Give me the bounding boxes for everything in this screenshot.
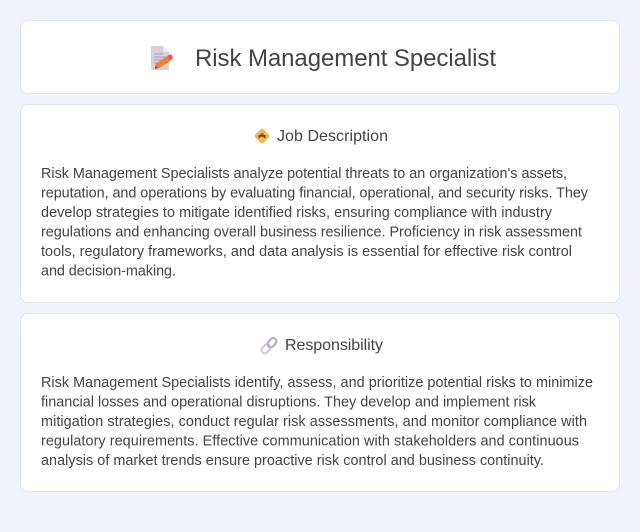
icon: chain link	[260, 336, 278, 354]
text block: responsibility: analysis of market trends ensure proactive risk control and business continuity.	[41, 453, 544, 469]
title text: Risk Management Specialist	[195, 45, 496, 72]
text block: job description	[41, 166, 589, 280]
heading: job description: Job Description	[277, 128, 388, 145]
text block: job description: tools, regulatory frameworks, and data analysis is essential for effective risk control	[41, 244, 572, 260]
text block: responsibility: Risk Management Specialists identify, assess, and prioritize potential risks to minimize	[41, 375, 593, 391]
text block: responsibility	[41, 375, 593, 469]
text block: responsibility: mitigation strategies, conduct regular risk assessments, and monitor compliance with	[41, 414, 587, 430]
text block: job description: and decision-making.	[41, 264, 176, 280]
icon: orange diamond sign	[254, 128, 270, 144]
panel: job description	[20, 104, 620, 303]
text block: responsibility: financial losses and operational disruptions. They develop and implement risk	[41, 394, 537, 410]
text block: job description: develop strategies to mitigate identified risks, ensuring compliance with industry	[41, 205, 553, 221]
text block: responsibility: regulatory requirements. Effective communication with stakeholders and continuous	[41, 434, 579, 450]
heading: responsibility: Responsibility	[285, 337, 383, 354]
icon: document with pencil	[151, 46, 173, 70]
text block: job description: Risk Management Specialists analyze potential threats to an organization's assets,	[41, 166, 567, 182]
text block: job description: regulations and enhancing overall business resilience. Proficiency in risk assessment	[41, 224, 582, 240]
text block: job description: reputation, and operations by evaluating financial, operational, and security risks. They	[41, 186, 589, 202]
panel: title	[20, 20, 620, 94]
panel: responsibility	[20, 313, 620, 492]
